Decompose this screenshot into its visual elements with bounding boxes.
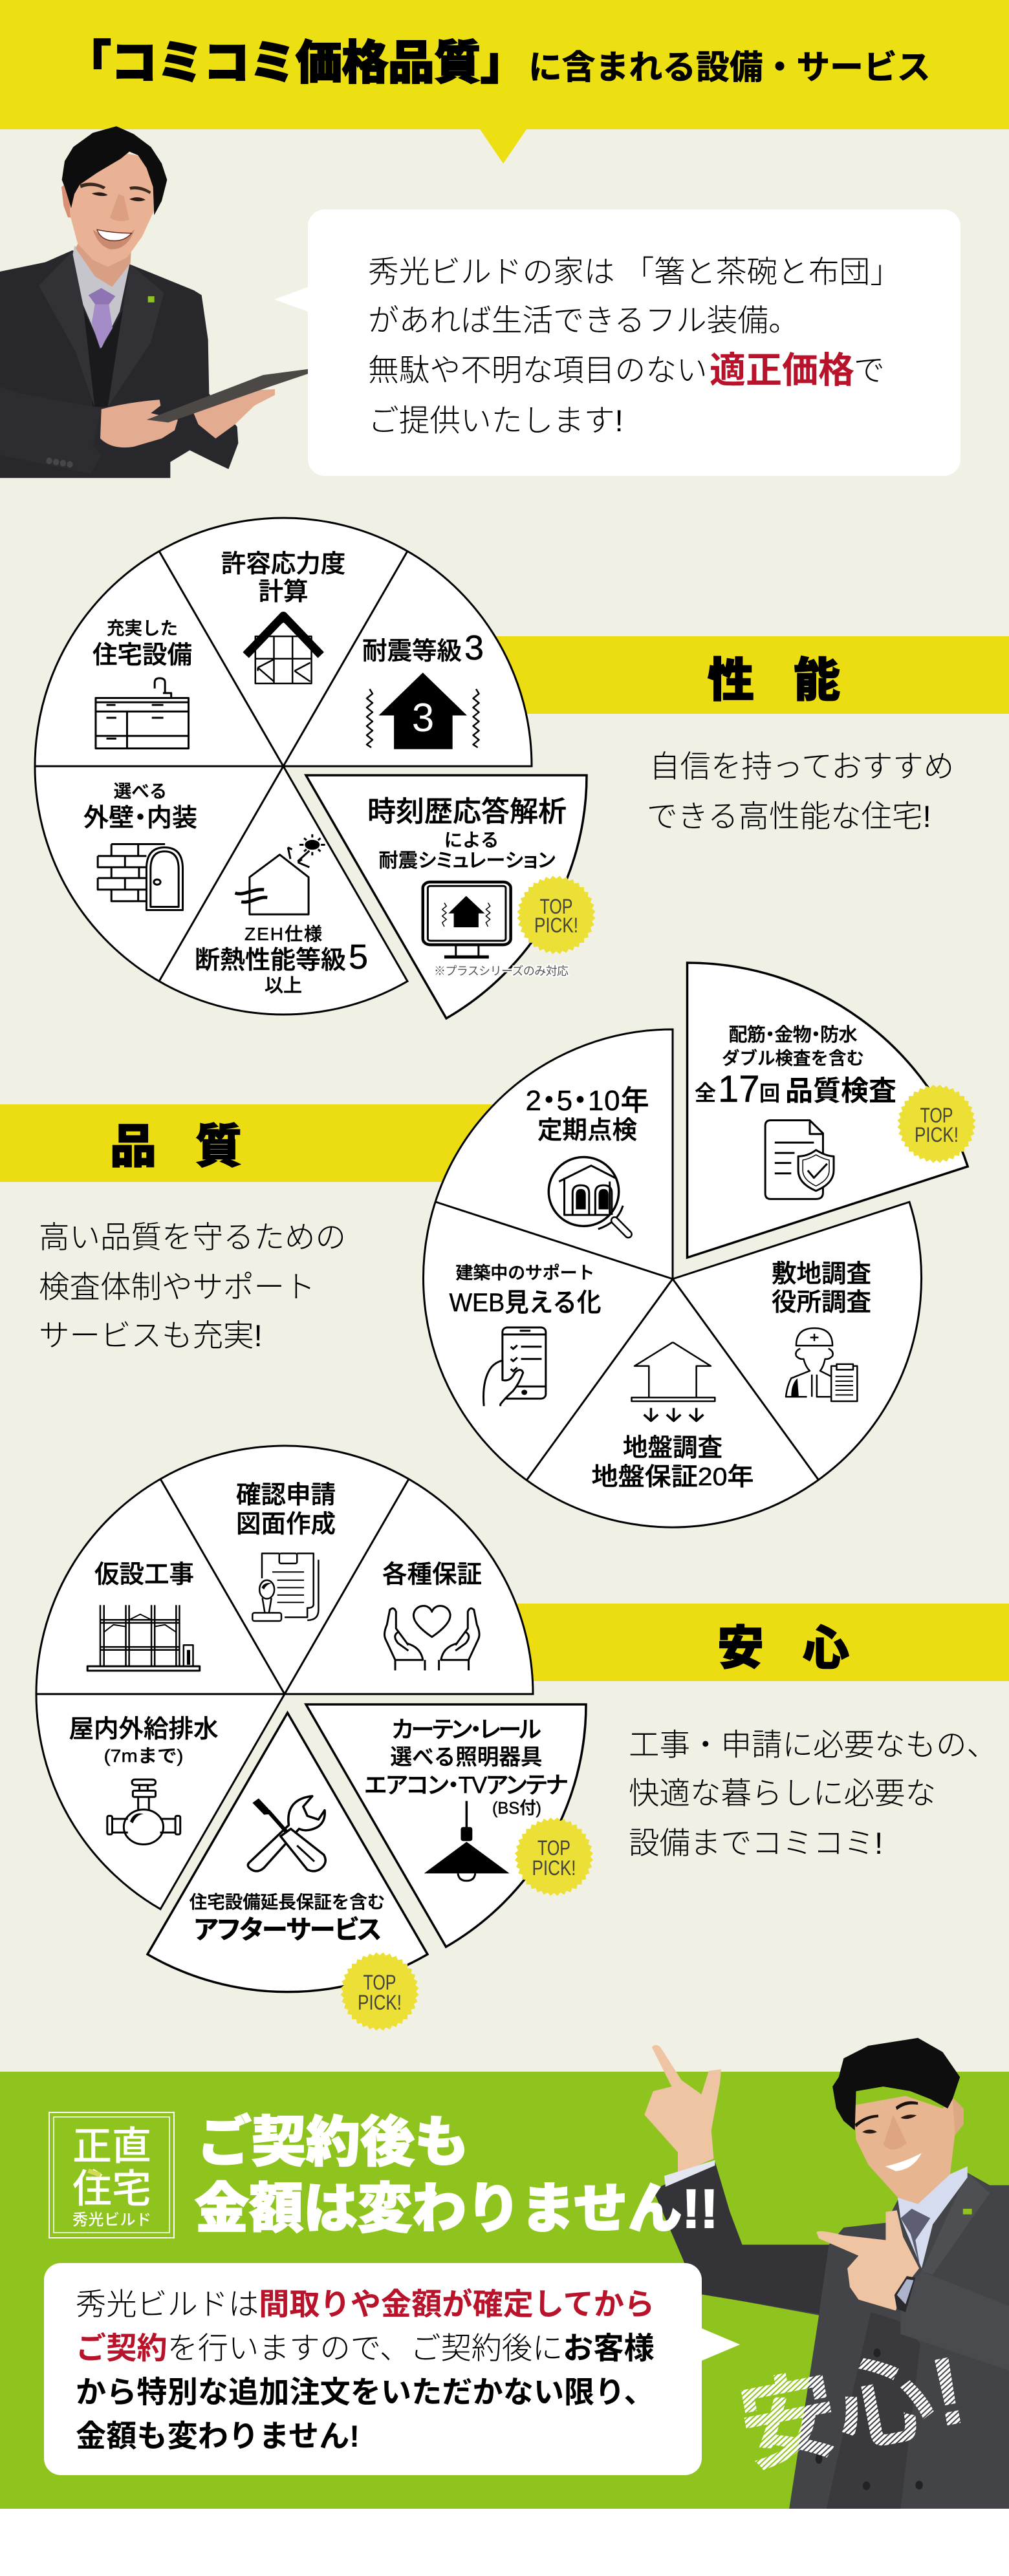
pie body [35, 518, 532, 1014]
text: performance [647, 750, 954, 834]
title: sub: に含まれる設備・サービス [528, 48, 931, 86]
icon: valve [107, 1779, 180, 1845]
slice: curtains, lighting, antenna (pop-out): (BS付) [492, 1798, 541, 1818]
slice: plumbing: 屋内外給排水 [69, 1715, 219, 1743]
slice: exterior and interior: 外壁・内装 [83, 804, 197, 832]
icon: house with 3 [367, 672, 479, 749]
heading: quality: 品質 [110, 1121, 281, 1173]
section band: performance [388, 636, 1009, 714]
title: main: 「コミコミ価格品質」 [65, 38, 526, 89]
icon: worker with clipboard [786, 1328, 857, 1401]
text: performance: 自信を持っておすすめ [649, 750, 954, 784]
slice: web visualisation [449, 1263, 602, 1406]
speech bubble: intro: があれば生活できるフル装備。 [368, 304, 799, 338]
logo badge: 住宅 [72, 2167, 151, 2211]
text: peace of mind: 快適な暮らしに必要な [629, 1777, 936, 1811]
badge: top pick [340, 1952, 419, 2031]
slice: curtains, lighting, antenna (pop-out): カーテン・レール [392, 1716, 541, 1743]
slice: time history response analysis (pop-out): 時刻歴応答解析 [367, 796, 567, 828]
slice: site survey: 役所調査 [772, 1289, 871, 1316]
photo: man with tablet [0, 126, 308, 478]
slice: temporary works [87, 1561, 200, 1671]
icon: document with shield [765, 1121, 834, 1199]
speech bubble: contract: 金額も変わりません! [76, 2420, 360, 2454]
logo badge [49, 2112, 174, 2238]
heading: performance: 性能 [708, 655, 880, 707]
text: quality: サービスも充実! [39, 1319, 263, 1353]
logo badge: 正直 [72, 2124, 151, 2168]
section band: peace of mind [388, 1604, 1009, 1681]
slice: periodic inspection [525, 1085, 649, 1234]
section band: quality [0, 1104, 517, 1182]
badge: top pick [897, 1084, 976, 1163]
slice: insulation grade 5: 断熱性能等級5 [195, 938, 368, 976]
slice: time history response analysis (pop-out): による [444, 830, 499, 851]
slice: allowable stress [221, 550, 345, 683]
note: ※プラスシリーズのみ対応 [434, 965, 569, 978]
slice: housing equipment: 充実した [107, 618, 178, 638]
icon: tools [248, 1796, 325, 1871]
icon: house frame [246, 616, 321, 683]
slice: seismic grade 3 [362, 628, 484, 749]
slice: ground survey: 地盤調査 [623, 1434, 722, 1462]
slice: plumbing: (7mまで) [103, 1746, 184, 1766]
icon: magnifier over house [548, 1157, 628, 1234]
badge: top pick: PICK! [532, 1856, 576, 1880]
slice: housing equipment [92, 618, 192, 749]
icon: scaffold [87, 1605, 200, 1671]
heading: price never changes: ご契約後も [197, 2112, 469, 2173]
photo: man pointing [644, 2038, 1009, 2509]
bubble text: 秀光ビルドの家は 「箸と茶碗と布団」 [368, 255, 901, 290]
badge: top pick: TOP [920, 1104, 953, 1127]
icon: hands and heart [385, 1606, 479, 1670]
slice: exterior and interior: 選べる [114, 781, 167, 801]
text: peace of mind: 工事・申請に必要なもの、 [629, 1728, 997, 1763]
bubble text: 秀光ビルドは間取りや金額が確定してから [76, 2288, 655, 2322]
badge: top pick: PICK! [915, 1123, 959, 1146]
badge: top pick: PICK! [534, 914, 578, 937]
text: performance: できる高性能な住宅! [647, 800, 931, 834]
speech bubble: contract: ご契約を行いますので、ご契約後にお客様 [76, 2332, 655, 2366]
badge: top pick [517, 875, 596, 954]
speech bubble: contract: から特別な追加注文をいただかない限り、 [76, 2376, 655, 2410]
slice: application drawings: 図面作成 [236, 1510, 336, 1538]
icon: pendant lamp [424, 1801, 510, 1881]
slice: ground survey [591, 1342, 754, 1491]
speech bubble: intro: ご提供いたします! [368, 404, 624, 438]
scribble: anshin: 安心! [731, 2335, 974, 2485]
slice: curtains, lighting, antenna (pop-out): エアコン・TVアンテナ [365, 1772, 568, 1798]
slice: web visualisation: 建築中のサポート [455, 1263, 595, 1283]
speech bubble: intro: 無駄や不明な項目のない [368, 354, 708, 388]
slice: allowable stress: 許容応力度 [221, 550, 345, 578]
slice: periodic inspection: 定期点検 [537, 1117, 637, 1144]
slice: temporary works: 仮設工事 [94, 1561, 194, 1589]
speech bubble: intro: で [854, 354, 885, 388]
slice: insulation grade 5: ZEH仕様 [244, 924, 323, 944]
slice: 17 inspections (pop-out): 配筋・金物・防水 [728, 1024, 858, 1046]
icon: phone checklist [484, 1327, 546, 1406]
slice: after service (pop-out): アフターサービス [194, 1916, 382, 1944]
slice: ground survey: 地盤保証20年 [591, 1463, 754, 1491]
badge: top pick: TOP [539, 895, 573, 918]
slice: time history response analysis (pop-out) [306, 775, 596, 1018]
heading: price never changes: 金額は変わりません!! [195, 2178, 718, 2239]
slice: 17 inspections (pop-out): 品質検査 [785, 1076, 896, 1107]
slice: 17 inspections (pop-out): 回 [759, 1082, 780, 1105]
heading: peace of mind: 安心 [717, 1623, 888, 1675]
slice: allowable stress: 計算 [258, 578, 309, 606]
badge: top pick [515, 1818, 593, 1896]
slice: after service (pop-out) [147, 1713, 428, 2031]
slice: site survey: 敷地調査 [772, 1260, 871, 1288]
badge: top pick: TOP [363, 1971, 396, 1994]
slice: site survey [772, 1260, 871, 1401]
panel: green price guarantee [0, 2038, 1009, 2509]
icon: kitchen [96, 678, 188, 749]
text: peace of mind [629, 1728, 997, 1861]
slice: application drawings [236, 1481, 336, 1621]
slice: seismic grade 3: 耐震等級3 [362, 628, 484, 667]
slice: insulation grade 5 [195, 834, 368, 996]
pie body [36, 1446, 533, 1909]
slice: exterior and interior [83, 781, 197, 910]
icon: ZEH house [235, 834, 325, 914]
slice: plumbing [69, 1715, 219, 1845]
slice: after service (pop-out): 住宅設備延長保証を含む [190, 1892, 385, 1912]
speech bubble: intro [274, 209, 960, 476]
slice: 17 inspections (pop-out): 全 [695, 1081, 716, 1105]
pie body [424, 1029, 922, 1527]
slice: periodic inspection: 2・5・10年 [525, 1085, 649, 1117]
slice: housing equipment: 住宅設備 [92, 641, 192, 669]
text: peace of mind: 設備までコミコミ! [629, 1827, 883, 1861]
slice: guarantees [382, 1561, 482, 1670]
slice: 17 inspections (pop-out) [687, 963, 976, 1258]
speech bubble: intro: 適正価格 [710, 350, 854, 391]
text: quality: 高い品質を守るための [39, 1221, 346, 1255]
pie chart: performance [35, 518, 596, 1018]
heading: price never changes [195, 2112, 718, 2239]
pie chart: peace of mind [36, 1446, 593, 2031]
text: quality [39, 1221, 346, 1353]
slice: time history response analysis (pop-out): 耐震シミュレーション [379, 850, 555, 872]
icon: document stamp [252, 1554, 318, 1621]
badge: top pick: PICK! [358, 1991, 402, 2014]
logo badge: 秀光ビルド [72, 2211, 151, 2229]
slice: insulation grade 5: 以上 [265, 976, 302, 996]
icon: monitor [423, 882, 511, 957]
icon: brick and door [98, 844, 183, 910]
slice: curtains, lighting, antenna (pop-out) [306, 1704, 593, 1947]
slice: application drawings: 確認申請 [236, 1481, 336, 1509]
text: quality: 検査体制やサポート [39, 1271, 316, 1305]
title banner [0, 0, 1009, 164]
slice: 17 inspections (pop-out): ダブル検査を含む [722, 1048, 864, 1068]
badge: top pick: TOP [537, 1836, 570, 1860]
speech bubble: contract [44, 2263, 740, 2475]
slice: guarantees: 各種保証 [382, 1561, 482, 1589]
icon: foundation [631, 1342, 715, 1421]
slice: seismic grade 3: 3 [412, 696, 434, 740]
slice: 17 inspections (pop-out): 17 [718, 1068, 760, 1110]
pie chart: quality [424, 963, 976, 1527]
slice: web visualisation: WEB見える化 [449, 1289, 602, 1317]
slice: curtains, lighting, antenna (pop-out): 選べる照明器具 [391, 1745, 542, 1770]
